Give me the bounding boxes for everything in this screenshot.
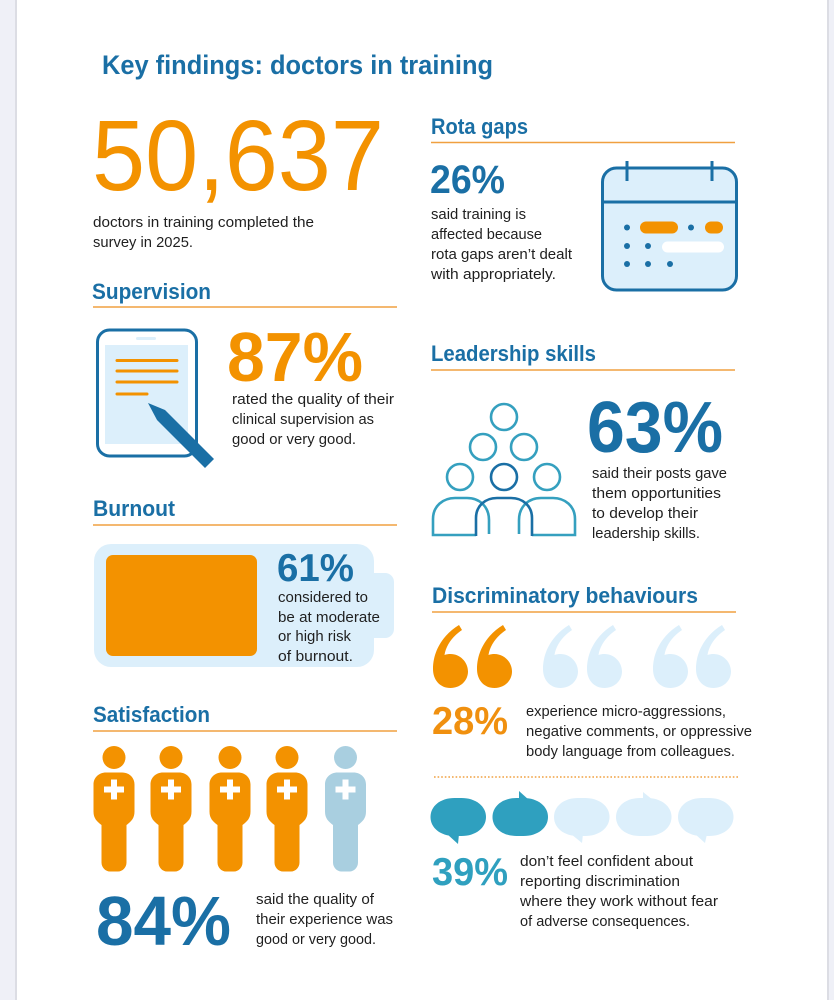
- panel: burnout: [93, 496, 397, 667]
- leadership text: them opportunities: [592, 486, 721, 502]
- panel: supervision: [92, 279, 397, 468]
- panel: satisfaction: [93, 702, 397, 960]
- micro-aggressions text: [526, 704, 752, 760]
- micro-aggressions text: negative comments, or oppressive: [526, 724, 752, 740]
- leadership text: leadership skills.: [592, 526, 700, 542]
- title: Key findings: doctors in training: [102, 50, 493, 80]
- micro-aggressions text: experience micro-aggressions,: [526, 704, 726, 720]
- icon: calendar: [602, 161, 737, 290]
- stat: 39%: 39%: [432, 851, 508, 894]
- rota gaps text: [430, 207, 572, 283]
- heading: discriminatory behaviours: Discriminatory behaviours: [432, 583, 698, 608]
- panel: leadership skills: [431, 341, 735, 542]
- burnout text: of burnout.: [278, 649, 353, 665]
- satisfaction text: [256, 892, 393, 948]
- burnout text: be at moderate: [278, 610, 380, 626]
- stat: 84%: 84%: [96, 882, 231, 960]
- icon: five doctors: [94, 746, 366, 872]
- stat: 87%: 87%: [227, 318, 363, 396]
- rota gaps text: affected because: [431, 227, 542, 243]
- leadership text: said their posts gave: [592, 466, 727, 482]
- rota gaps text: with appropriately.: [430, 267, 556, 283]
- heading: supervision: Supervision: [92, 279, 211, 304]
- respondents text: [93, 215, 314, 251]
- leadership text: to develop their: [592, 506, 698, 522]
- panel: rota gaps: [430, 114, 737, 290]
- reporting text: [519, 854, 718, 930]
- heading: satisfaction: Satisfaction: [93, 702, 210, 727]
- respondents text: doctors in training completed the: [93, 215, 314, 231]
- panel: discriminatory behaviours: [430, 583, 752, 930]
- heading: leadership skills: Leadership skills: [431, 341, 596, 366]
- satisfaction text: good or very good.: [256, 932, 376, 948]
- supervision text: good or very good.: [232, 432, 356, 448]
- leadership text: [592, 466, 727, 542]
- icon: quotation marks: [433, 625, 731, 688]
- stat: 26%: 26%: [430, 158, 505, 202]
- supervision text: rated the quality of their: [232, 392, 394, 408]
- icon: speech bubbles: [430, 791, 734, 844]
- reporting text: where they work without fear: [519, 894, 718, 910]
- satisfaction text: their experience was: [256, 912, 393, 928]
- stat: 28%: 28%: [432, 700, 508, 743]
- panel: respondents: [92, 100, 384, 251]
- heading: rota gaps: Rota gaps: [431, 114, 528, 139]
- burnout text: considered to: [278, 590, 368, 606]
- reporting text: reporting discrimination: [520, 874, 680, 890]
- stat: 63%: 63%: [587, 388, 723, 468]
- rota gaps text: said training is: [431, 207, 526, 223]
- supervision text: clinical supervision as: [232, 412, 374, 428]
- satisfaction text: said the quality of: [256, 892, 375, 908]
- reporting text: don’t feel confident about: [520, 854, 693, 870]
- burnout text: [278, 590, 380, 665]
- big number: 50,637: 50,637: [92, 100, 384, 212]
- icon: battery: [94, 544, 394, 667]
- stat: 61%: 61%: [277, 547, 354, 590]
- rota gaps text: rota gaps aren’t dealt: [431, 247, 572, 263]
- supervision text: [232, 392, 394, 448]
- heading: burnout: Burnout: [93, 496, 176, 521]
- icon: tablet and pen: [98, 330, 214, 468]
- micro-aggressions text: body language from colleagues.: [526, 744, 735, 760]
- reporting text: of adverse consequences.: [520, 914, 690, 930]
- icon: group of people: [433, 404, 575, 536]
- burnout text: or high risk: [278, 629, 352, 645]
- respondents text: survey in 2025.: [93, 235, 193, 251]
